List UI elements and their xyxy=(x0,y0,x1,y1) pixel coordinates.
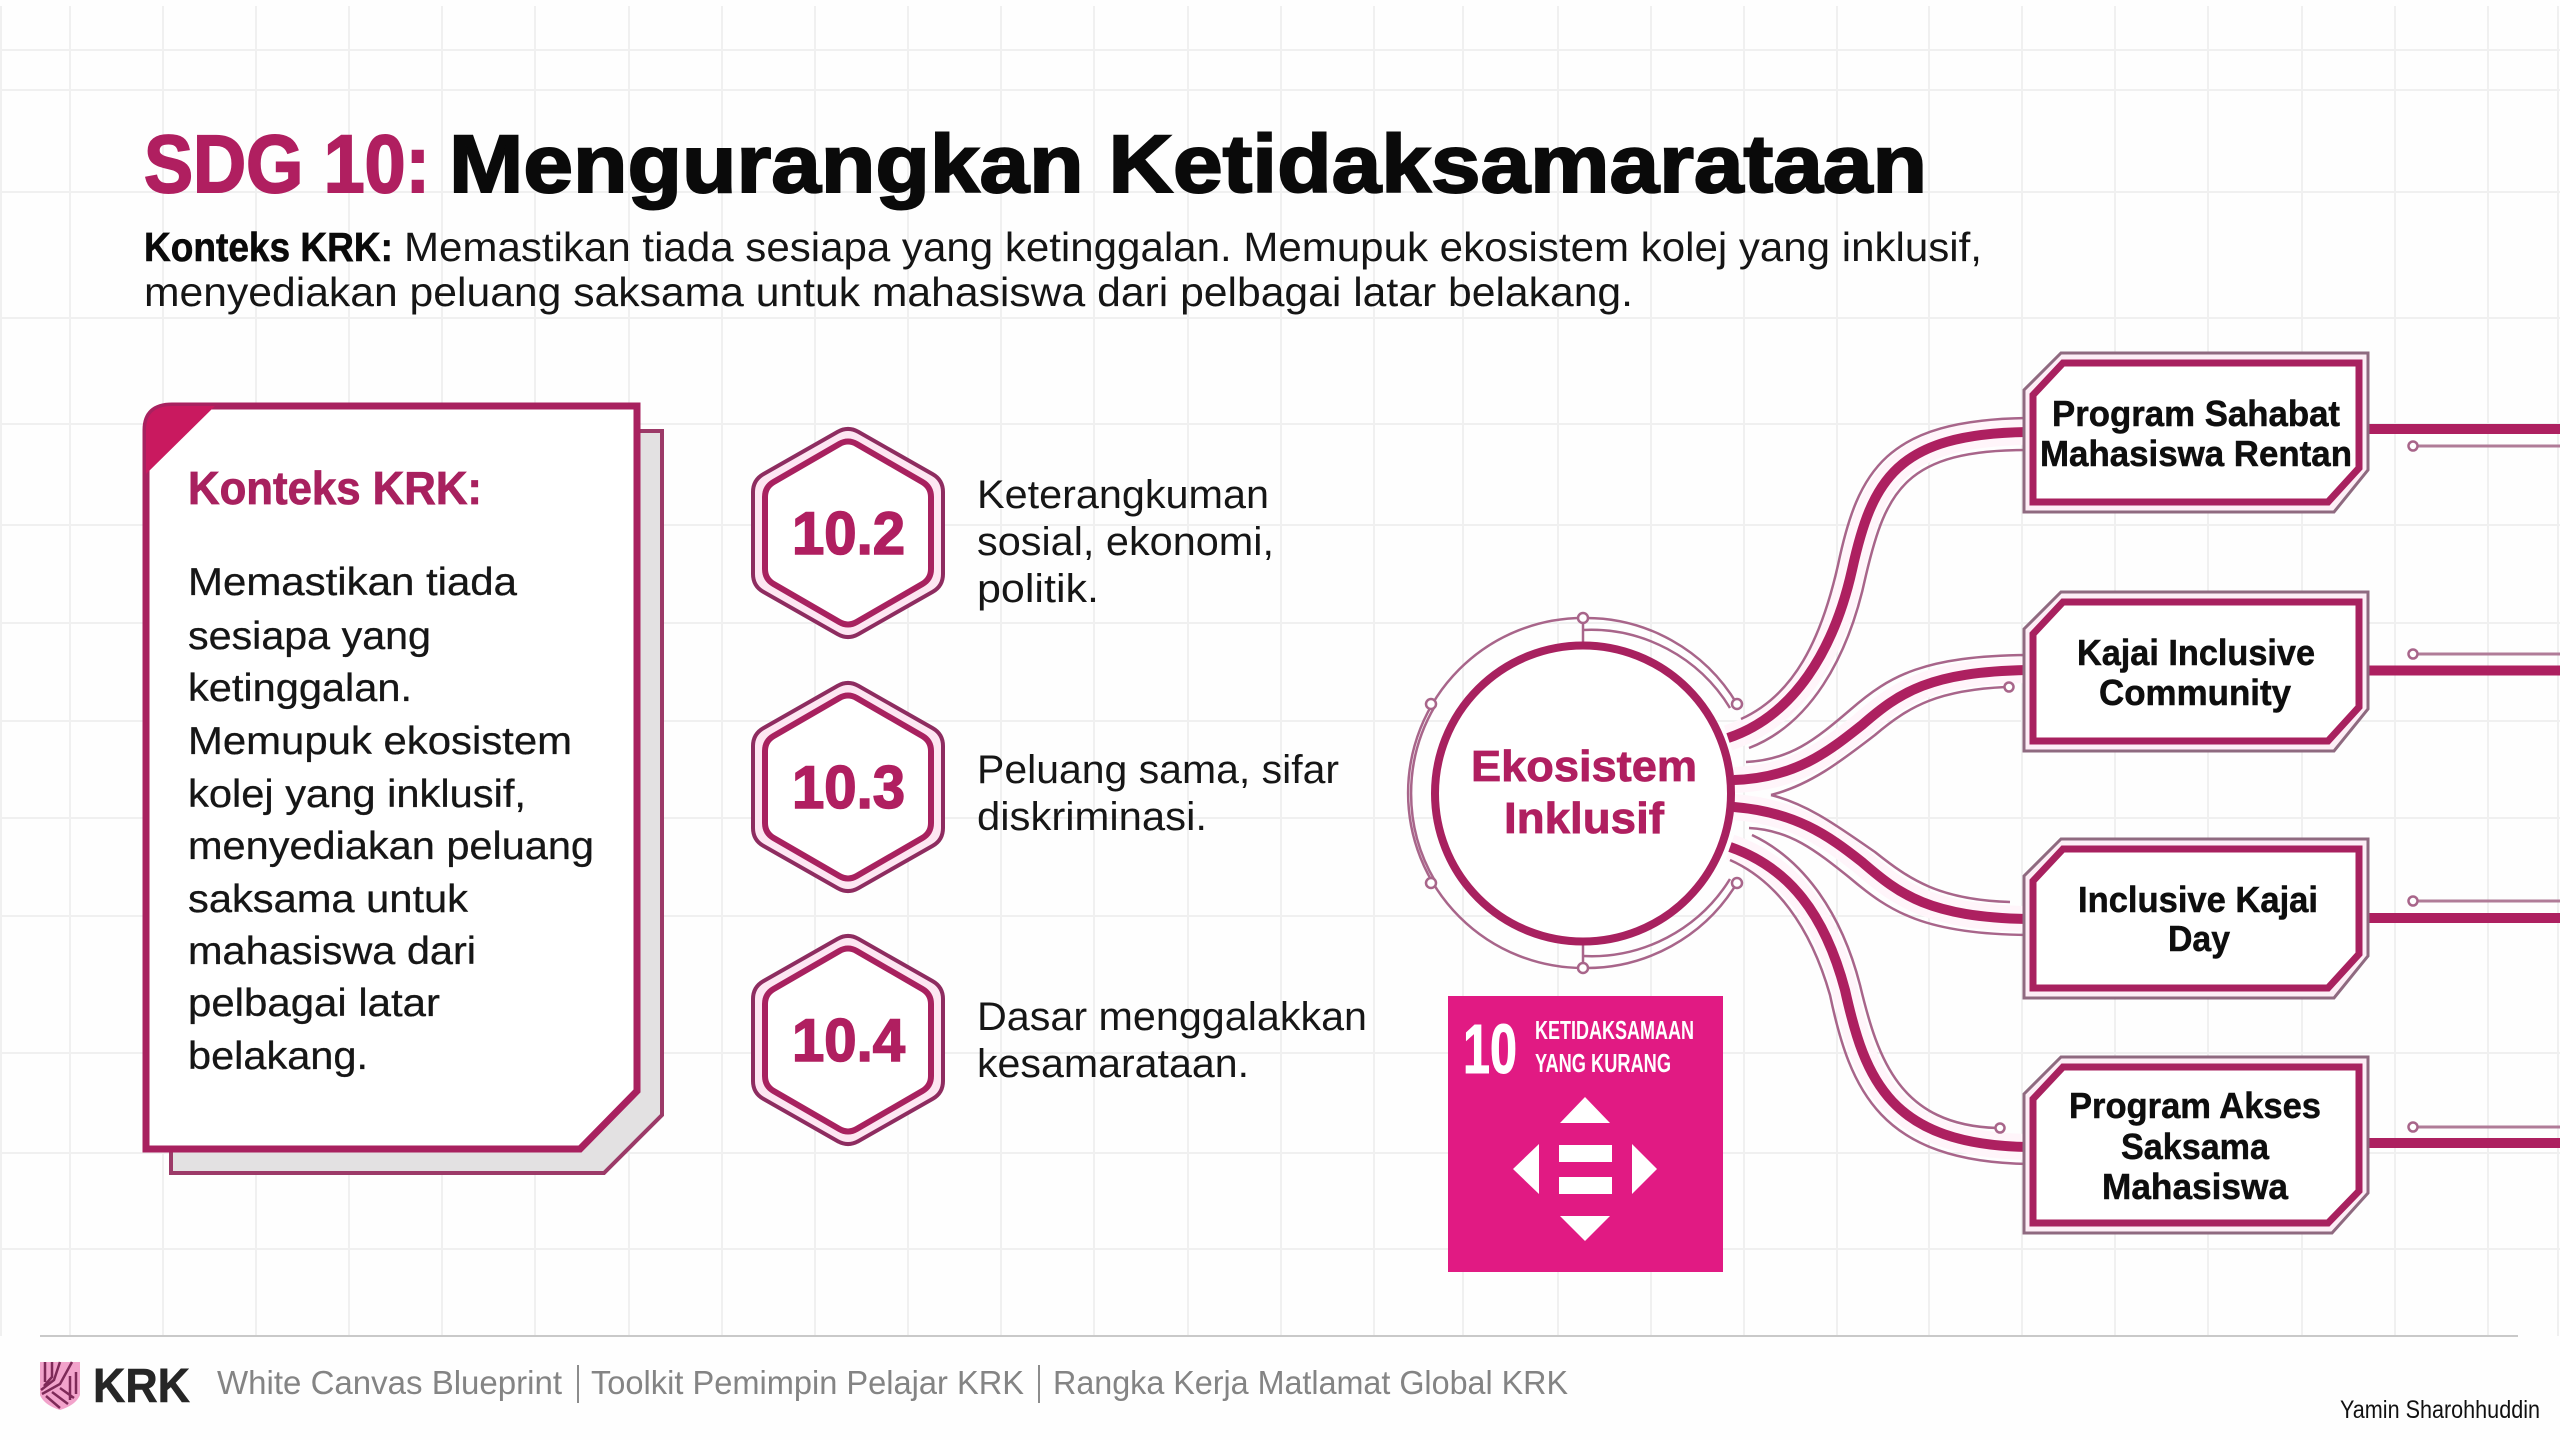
box: Program Sahabat Mahasiswa Rentan: Program Sahabat xyxy=(2052,393,2340,434)
title: Mengurangkan Ketidaksamarataan xyxy=(449,119,1927,210)
corner accent xyxy=(146,406,215,474)
panel body text: mahasiswa dari xyxy=(188,930,476,973)
circle label: Inklusif xyxy=(1504,794,1664,843)
subtitle text block: menyediakan peluang saksama untuk mahasiswa dari pelbagai latar belakang. xyxy=(144,269,1633,315)
panel body text: sesiapa yang xyxy=(188,615,431,658)
box: Program Akses Saksama Mahasiswa: Program Akses xyxy=(2069,1085,2321,1126)
icon: KRK shield xyxy=(40,1362,80,1410)
panel body text: pelbagai latar xyxy=(188,982,440,1025)
icon: SDG 10 badge: KETIDAKSAMAAN xyxy=(1535,1015,1694,1045)
description 10.4: kesamarataan. xyxy=(977,1042,1249,1086)
description 10.3: diskriminasi. xyxy=(977,795,1207,839)
circle xyxy=(1435,646,1731,942)
box: Program Sahabat Mahasiswa Rentan: Mahasiswa Rentan xyxy=(2040,433,2352,474)
target 10.2 xyxy=(753,429,1274,637)
description 10.4 xyxy=(977,995,1367,1086)
title: SDG 10: xyxy=(144,119,430,210)
panel body text: Memupuk ekosistem xyxy=(188,720,572,763)
panel body text: Memastikan tiada xyxy=(188,561,517,604)
footer text xyxy=(217,1364,1568,1403)
description 10.2: politik. xyxy=(977,567,1099,611)
icon: arrows and equals sign xyxy=(1513,1097,1657,1241)
icon: SDG 10 badge: YANG KURANG xyxy=(1535,1048,1671,1078)
description 10.2: Keterangkuman xyxy=(977,473,1269,517)
circle label: Ekosistem xyxy=(1471,742,1697,791)
panel body text: saksama untuk xyxy=(188,878,469,921)
hexagon badge 10.3 xyxy=(753,683,943,891)
icon: SDG 10 badge xyxy=(1448,996,1723,1272)
description 10.3: Peluang sama, sifar xyxy=(977,748,1339,792)
footer text: White Canvas Blueprint xyxy=(217,1364,562,1401)
footer text: Rangka Kerja Matlamat Global KRK xyxy=(1053,1364,1568,1401)
orbit rings xyxy=(1408,613,1742,973)
hexagon badge 10.4: 10.4 xyxy=(792,1007,906,1074)
panel body text: kolej yang inklusif, xyxy=(188,773,526,816)
panel heading: Konteks KRK: xyxy=(188,462,482,514)
circle label xyxy=(1471,742,1697,843)
panel body text: menyediakan peluang xyxy=(188,825,594,868)
panel: konteks KRK xyxy=(146,406,662,1173)
box: Program Sahabat Mahasiswa Rentan xyxy=(2024,353,2368,512)
logo wordmark: KRK xyxy=(93,1360,190,1413)
box: Kajai Inclusive Community xyxy=(2024,592,2368,751)
right side output lines xyxy=(2360,429,2560,1143)
panel body text xyxy=(188,561,594,1078)
hexagon badge 10.2 xyxy=(753,429,943,637)
panel body text: belakang. xyxy=(188,1035,368,1078)
box: Program Akses Saksama Mahasiswa: Mahasiswa xyxy=(2102,1166,2289,1207)
box: Inclusive Kajai Day: Day xyxy=(2168,918,2230,959)
panel body text: ketinggalan. xyxy=(188,667,412,710)
description 10.2 xyxy=(977,473,1274,611)
box: Program Akses Saksama Mahasiswa: Saksama xyxy=(2121,1126,2270,1167)
branch connectors xyxy=(1728,418,2029,1164)
description 10.3 xyxy=(977,748,1339,839)
footer divider xyxy=(40,1335,2518,1337)
hexagon badge 10.3: 10.3 xyxy=(792,754,905,821)
hexagon badge 10.4 xyxy=(753,936,943,1144)
hexagon badge 10.2: 10.2 xyxy=(792,500,905,567)
description 10.4: Dasar menggalakkan xyxy=(977,995,1367,1039)
footer text: Toolkit Pemimpin Pelajar KRK xyxy=(591,1364,1024,1401)
subtitle text block: Konteks KRK: xyxy=(144,224,393,270)
description 10.2: sosial, ekonomi, xyxy=(977,520,1274,564)
footer logo xyxy=(40,1360,190,1413)
target 10.4 xyxy=(753,936,1367,1144)
subtitle text block: Memastikan tiada sesiapa yang ketinggalan. Memupuk ekosistem kolej yang inklusif, xyxy=(404,224,1982,270)
central node: Ekosistem Inklusif xyxy=(1408,613,1742,973)
target 10.3 xyxy=(753,683,1339,891)
subtitle text block xyxy=(144,224,1982,315)
icon: SDG 10 badge: 10 xyxy=(1463,1010,1517,1088)
box: Inclusive Kajai Day: Inclusive Kajai xyxy=(2078,879,2318,920)
box: Inclusive Kajai Day xyxy=(2024,839,2368,998)
box: Kajai Inclusive Community: Community xyxy=(2099,672,2291,713)
box: Kajai Inclusive Community: Kajai Inclusive xyxy=(2077,632,2315,673)
box: Program Akses Saksama Mahasiswa xyxy=(2024,1057,2368,1233)
